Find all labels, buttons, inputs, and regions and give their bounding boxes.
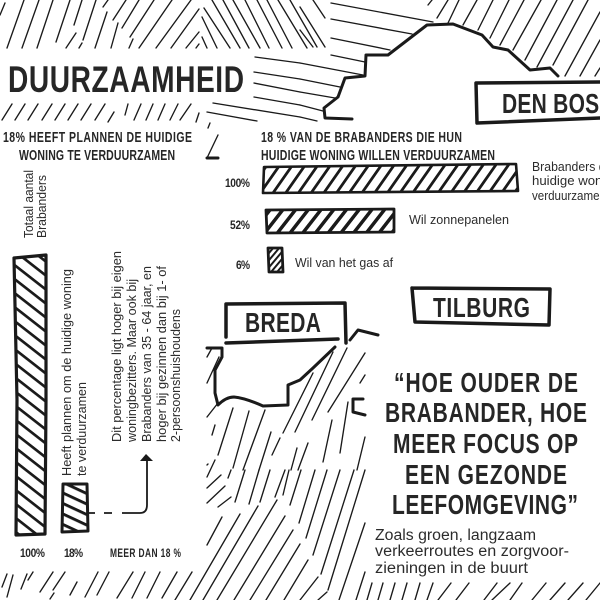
axis labels: 100% (20, 547, 45, 560)
panel: plans to make home sustainable (3, 128, 192, 560)
label: solar panels: Wil zonnepanelen (409, 213, 509, 227)
label: Breda: BREDA (245, 308, 321, 339)
label: total Brabanders (22, 170, 49, 238)
bar description (532, 160, 600, 203)
label: Tilburg: TILBURG (433, 293, 530, 324)
heading: right panel (261, 128, 495, 163)
label: Breda (226, 303, 346, 343)
percent labels: 100% (225, 177, 250, 190)
text: explanation: woningbezitters. Maar ook bij (124, 279, 139, 443)
quote note: Zoals groen, langzaam (375, 527, 536, 544)
quote: “HOE OUDER DE (394, 368, 578, 399)
label: total Brabanders: Brabanders (35, 175, 49, 238)
heading: right panel: HUIDIGE WONING WILLEN VERDUURZAMEN (261, 146, 495, 163)
label: plans: Heeft plannen om de huidige woning (59, 269, 74, 476)
percent labels (225, 177, 250, 272)
title: DUURZAAMHEID (8, 59, 244, 101)
quote: EEN GEZONDE (405, 460, 567, 491)
axis labels: MEER DAN 18 % (110, 548, 181, 560)
label: total Brabanders: Totaal aantal (22, 170, 36, 238)
map outline: Tilburg fragment (207, 158, 378, 415)
quote: LEEFOMGEVING” (392, 490, 578, 521)
quote note (375, 527, 569, 577)
label: Tilburg (412, 288, 550, 325)
arrow: more than 18 percent (88, 454, 153, 513)
quote note: verkeerroutes en zorgvoor- (375, 543, 569, 560)
axis labels (20, 547, 181, 560)
text: explanation: hoger bij gezinnen dan bij 1- of (154, 266, 169, 442)
map outline: Breda (207, 347, 335, 406)
bar: 52 percent (266, 209, 394, 233)
quote (385, 368, 587, 521)
text: explanation (109, 251, 183, 443)
text: explanation: Brabanders van 35 - 64 jaar, en (139, 266, 154, 442)
label: plans (59, 269, 89, 476)
heading: left panel: WONING TE VERDUURZAMEN (19, 146, 175, 163)
bar: 18 percent (62, 484, 88, 532)
axis labels: 18% (64, 547, 83, 560)
text: explanation: 2-persoonshuishoudens (168, 309, 183, 442)
text: explanation: Dit percentage ligt hoger bij eigen (109, 251, 124, 442)
bar: 100 percent (14, 255, 46, 535)
percent labels: 52% (230, 219, 250, 232)
bar: 100 percent (263, 164, 518, 193)
quote: MEER FOCUS OP (393, 429, 578, 460)
heading: right panel: 18 % VAN DE BRABANDERS DIE HUN (261, 128, 462, 145)
percent labels: 6% (236, 259, 250, 272)
label: off gas: Wil van het gas af (295, 256, 394, 270)
heading: left panel (3, 128, 192, 163)
quote: BRABANDER, HOE (385, 398, 587, 429)
map outline: Den Bosch (324, 24, 558, 119)
heading: left panel: 18% HEEFT PLANNEN DE HUIDIGE (3, 128, 192, 145)
label: plans: te verduurzamen (74, 382, 89, 476)
bar: 6 percent (268, 248, 283, 272)
panel: who wants to make home sustainable (225, 128, 600, 272)
label: Den Bosch (476, 82, 600, 123)
quote note: zieningen in de buurt (375, 560, 529, 577)
